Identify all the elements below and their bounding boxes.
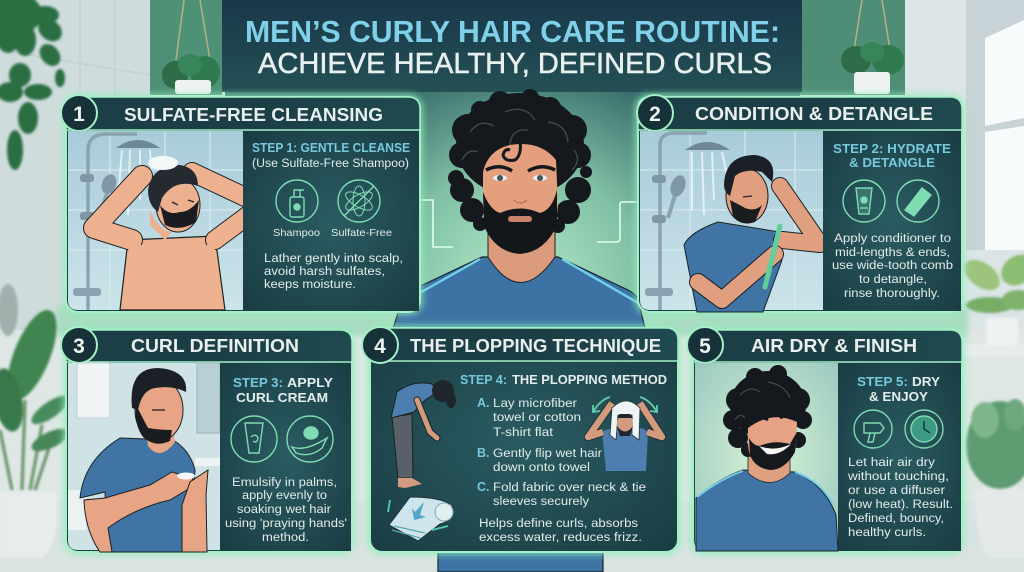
- window: [960, 0, 1024, 356]
- summary text: [479, 516, 642, 544]
- icon label: shampoo: Shampoo: [273, 227, 320, 239]
- summary text: Helps define curls, absorbs: [479, 516, 638, 530]
- list item C: [477, 480, 646, 508]
- number badge: 5: [699, 335, 711, 358]
- body text: [225, 475, 347, 544]
- plant: lower-right: [966, 399, 1024, 558]
- curly hair: [448, 89, 592, 233]
- text panel: [838, 363, 961, 551]
- header bar: [66, 97, 420, 130]
- step label: STEP 1: GENTLE CLEANSE: [252, 141, 410, 155]
- illustration: smiling man with curls: [695, 363, 838, 551]
- heading: AIR DRY & FINISH: [751, 336, 917, 356]
- body text: soaking wet hair: [237, 502, 331, 516]
- list item B: [477, 446, 602, 474]
- step label: APPLY: [287, 376, 334, 390]
- step label: STEP 3:: [233, 376, 283, 390]
- header bar: [370, 328, 678, 361]
- number badge: [637, 95, 673, 131]
- list item C: C.: [477, 480, 490, 494]
- beard: [483, 190, 557, 254]
- step label: DRY: [912, 375, 941, 389]
- body text: Let hair air dry: [848, 455, 936, 469]
- step label: STEP 5:: [857, 375, 908, 389]
- step label: STEP 2: HYDRATE: [833, 142, 951, 156]
- number badge: 3: [73, 335, 85, 358]
- title: ACHIEVE HEALTHY, DEFINED CURLS: [258, 48, 772, 80]
- illustration: man with towel: [588, 401, 662, 471]
- step label: & ENJOY: [869, 390, 929, 404]
- illustration: man bending over: [391, 380, 456, 488]
- number badge: [687, 327, 723, 363]
- body text: [264, 251, 403, 291]
- header bar: [66, 330, 352, 362]
- number badge: 4: [374, 335, 386, 358]
- list item B: down onto towel: [493, 460, 590, 474]
- body text: to detangle,: [859, 272, 927, 286]
- number badge: [61, 95, 97, 131]
- icon: cream tube: [231, 416, 277, 462]
- icon: shampoo bottle: [276, 180, 318, 222]
- plant: hanging planter right: [841, 0, 904, 94]
- subtitle: (Use Sulfate-Free Shampoo): [252, 156, 409, 170]
- body text: Emulsify in palms,: [232, 475, 337, 489]
- body text: (low heat). Result.: [848, 497, 953, 511]
- number badge: [362, 327, 398, 363]
- t-shirt: [392, 257, 646, 572]
- heading: CONDITION & DETANGLE: [695, 104, 933, 124]
- body text: [847, 455, 953, 539]
- body text: keeps moisture.: [264, 277, 356, 291]
- text panel: [220, 363, 351, 551]
- neck: [488, 226, 555, 282]
- central portrait: [392, 89, 646, 572]
- list item C: sleeves securely: [493, 494, 590, 508]
- eyes and brows: [486, 167, 555, 171]
- body text: [832, 231, 953, 300]
- body text: method.: [262, 530, 309, 544]
- header bar: [693, 330, 962, 362]
- panel 4: the plopping technique: [362, 325, 681, 555]
- body text: use wide-tooth comb: [832, 258, 953, 272]
- plant: right middle: [959, 248, 1024, 346]
- list item A: [477, 396, 581, 439]
- list item A: T-shirt flat: [493, 425, 554, 439]
- icon label: sulfate-free: Sulfate-Free: [331, 227, 392, 239]
- glowing connector lines: [421, 200, 640, 247]
- list item B: Gently flip wet hair: [493, 446, 602, 460]
- panel 5: air dry and finish: [687, 327, 965, 555]
- face: [483, 144, 558, 254]
- step label: THE PLOPPING METHOD: [512, 373, 667, 387]
- plant: hanging planter left: [162, 0, 220, 94]
- body text: apply evenly to: [242, 488, 327, 502]
- hair curl on forehead: [503, 140, 520, 160]
- plant: top-left foliage: [0, 0, 66, 170]
- plant: lower-left: [0, 284, 73, 558]
- body text: avoid harsh sulfates,: [264, 264, 385, 278]
- panel 3: curl definition: [61, 327, 355, 555]
- body text: mid-lengths & ends,: [835, 245, 950, 259]
- icon: clock: [905, 410, 943, 448]
- icon: palm with cream: [287, 416, 333, 462]
- step label: [857, 375, 941, 404]
- body text: Lather gently into scalp,: [264, 251, 403, 265]
- body text: Apply conditioner to: [834, 231, 951, 245]
- heading: THE PLOPPING TECHNIQUE: [410, 336, 661, 356]
- body text: Defined, bouncy,: [848, 511, 944, 525]
- list item A: A.: [477, 396, 490, 410]
- heading: SULFATE-FREE CLEANSING: [124, 105, 383, 125]
- icon: conditioner tube: [843, 180, 885, 222]
- body text: without touching,: [847, 469, 949, 483]
- body text: or use a diffuser: [848, 483, 945, 497]
- step label: STEP 4:: [460, 373, 507, 387]
- hair highlights: [462, 109, 578, 170]
- body text: healthy curls.: [848, 525, 926, 539]
- header bar: [638, 97, 962, 130]
- step label: [233, 376, 334, 405]
- list item A: towel or cotton: [493, 410, 581, 424]
- icon: sulfate-free: [338, 180, 380, 222]
- step label: [833, 142, 951, 170]
- list item A: Lay microfiber: [493, 396, 577, 410]
- list item C: Fold fabric over neck & tie: [493, 480, 646, 494]
- title: MEN’S CURLY HAIR CARE ROUTINE:: [245, 14, 780, 49]
- title: [245, 14, 780, 80]
- summary text: excess water, reduces frizz.: [479, 530, 642, 544]
- illustration: man conditioning hair: [640, 131, 823, 312]
- panel 1: sulfate-free cleansing: [61, 94, 423, 315]
- illustration: rolled towel: [388, 497, 453, 541]
- body text: using 'praying hands': [225, 516, 347, 530]
- illustration: man applying cream: [68, 363, 220, 552]
- icon: diffuser dryer: [854, 410, 892, 448]
- step label: & DETANGLE: [849, 156, 935, 170]
- arrows: towel wrap direction: [593, 397, 657, 412]
- text panel: [243, 131, 419, 311]
- number badge: 1: [73, 103, 85, 126]
- heading: CURL DEFINITION: [131, 336, 299, 356]
- number badge: [61, 327, 97, 363]
- list item B: B.: [477, 446, 490, 460]
- number badge: 2: [649, 103, 661, 126]
- icon: comb: [897, 180, 939, 222]
- text panel: [823, 131, 961, 311]
- step label: CURL CREAM: [236, 391, 328, 405]
- panel 2: condition and detangle: [635, 94, 965, 315]
- body text: rinse thoroughly.: [844, 286, 940, 300]
- illustration: man shampooing in shower: [68, 131, 262, 310]
